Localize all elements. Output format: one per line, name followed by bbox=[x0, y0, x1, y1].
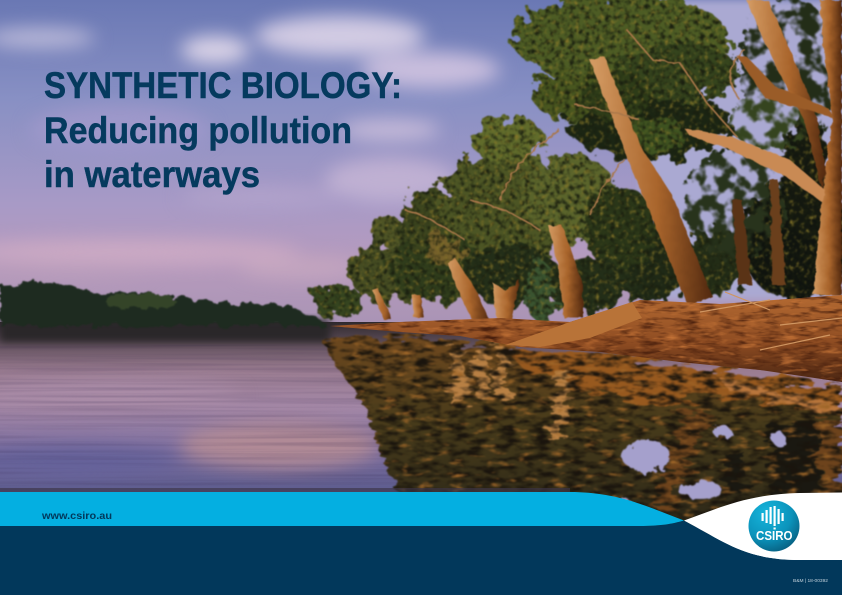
fallen log bbox=[505, 302, 642, 347]
footer dark band bbox=[0, 520, 842, 595]
reflection of trees in water bbox=[318, 336, 842, 532]
CSIRO logo bbox=[748, 500, 800, 552]
logo bars bbox=[762, 506, 784, 530]
far treeline reflection bbox=[0, 320, 330, 342]
sky reflected in gaps bbox=[611, 426, 785, 510]
water tints bbox=[0, 382, 380, 478]
logo wordmark: CSIRO bbox=[756, 529, 793, 543]
tree trunks bbox=[372, 0, 842, 320]
rear dark trees bbox=[565, 91, 842, 300]
cyan band bbox=[0, 492, 684, 526]
mid canopy bbox=[312, 116, 656, 322]
far treeline bbox=[0, 282, 325, 326]
water bbox=[0, 322, 842, 532]
reference code: B&M | 18-00392 bbox=[793, 578, 828, 583]
title: Reducing pollution bbox=[44, 110, 352, 151]
white swoosh bbox=[684, 492, 842, 560]
title: SYNTHETIC BIOLOGY: bbox=[44, 65, 402, 106]
title: in waterways bbox=[44, 154, 260, 195]
band top shadow bbox=[0, 488, 570, 492]
clouds bbox=[0, 16, 500, 278]
upper canopy bbox=[512, 0, 738, 153]
sky bbox=[0, 0, 842, 330]
title bbox=[44, 65, 402, 195]
sparse foliage right of trunk bbox=[685, 0, 840, 260]
river bank bbox=[330, 292, 842, 382]
sky behind right trees bbox=[640, 0, 842, 300]
water streaks bbox=[0, 345, 430, 492]
website url: www.csiro.au bbox=[41, 511, 112, 522]
